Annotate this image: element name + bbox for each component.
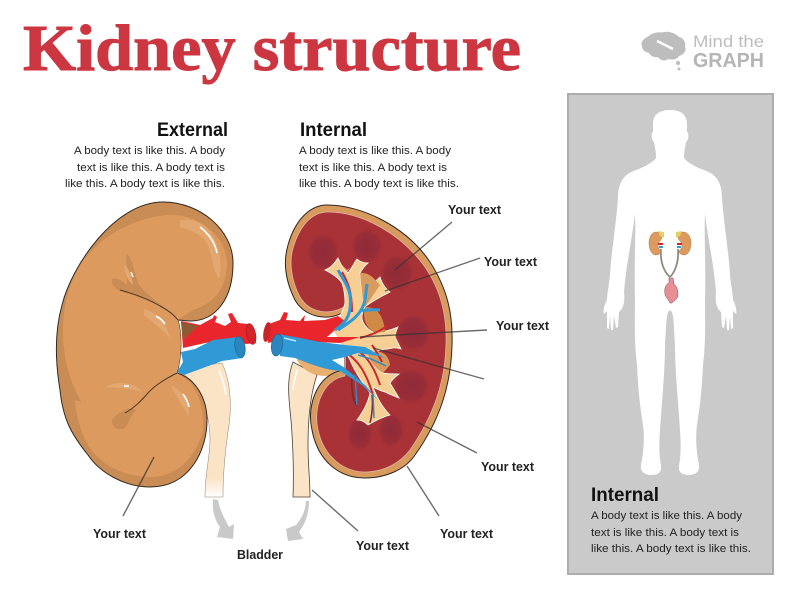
label: your text 1: Your text (448, 202, 502, 217)
panel body text: A body text is like this. A body (591, 510, 743, 522)
arrow: left to bladder (213, 499, 234, 539)
label: your text 6: Your text (356, 538, 410, 553)
vein branches (335, 270, 380, 330)
human silhouette (604, 110, 736, 475)
panel body text (591, 510, 751, 555)
artery, external (181, 313, 256, 348)
label: bladder: Bladder (237, 547, 283, 562)
illustration: external kidney (56, 202, 258, 497)
label: your text 5: Your text (440, 526, 494, 541)
text block: internal body (299, 145, 459, 190)
ureter, internal (289, 362, 317, 497)
renal pelvis (325, 258, 401, 425)
panel body text: like this. A body text is like this. (591, 543, 751, 555)
logo: Mind the Graph: GRAPH (693, 50, 764, 72)
text block: external body (65, 145, 226, 190)
text block: external body: like this. A body text is like this. (65, 178, 225, 190)
label: your text, external kidney: Your text (93, 526, 147, 541)
ureters and urinary system (649, 231, 691, 303)
ureter, external (183, 363, 230, 497)
arrow: right to bladder (286, 501, 309, 541)
label: your text 3: Your text (496, 318, 550, 333)
capsule (285, 205, 452, 478)
highlights (180, 220, 221, 279)
callout lines (123, 222, 487, 531)
minor calyces, orange (360, 273, 380, 307)
vein, internal (278, 334, 385, 400)
kidney body, external (56, 202, 233, 487)
text block: internal body: like this. A body text is like this. (299, 178, 459, 190)
heading: Internal: Internal (300, 120, 367, 141)
title: Kidney structure (23, 12, 521, 85)
small kidneys (649, 232, 662, 255)
illustration: internal kidney (262, 205, 452, 497)
text block: internal body: A body text is like this. A body (299, 145, 452, 157)
text block: external body: text is like this. A body text is (77, 162, 226, 174)
logo: Mind the Graph: Mind the (693, 32, 764, 51)
logo: Mind the Graph (642, 32, 764, 72)
label: your text 2: Your text (484, 254, 538, 269)
artery, internal (266, 312, 360, 343)
icon: brain (642, 32, 686, 60)
small bladder (665, 278, 678, 303)
vein, external (177, 337, 243, 375)
cortex (291, 212, 446, 472)
heading: External: External (157, 120, 228, 141)
panel body text: text is like this. A body text is (591, 527, 740, 539)
pyramids (306, 227, 432, 452)
panel: body location (568, 94, 773, 574)
label: your text 4: Your text (481, 459, 535, 474)
folds and creases (112, 254, 165, 308)
text block: external body: A body text is like this. A body (74, 145, 226, 157)
text block: internal body: text is like this. A body text is (299, 162, 448, 174)
red branches (342, 272, 388, 395)
panel heading: Internal (591, 485, 659, 506)
